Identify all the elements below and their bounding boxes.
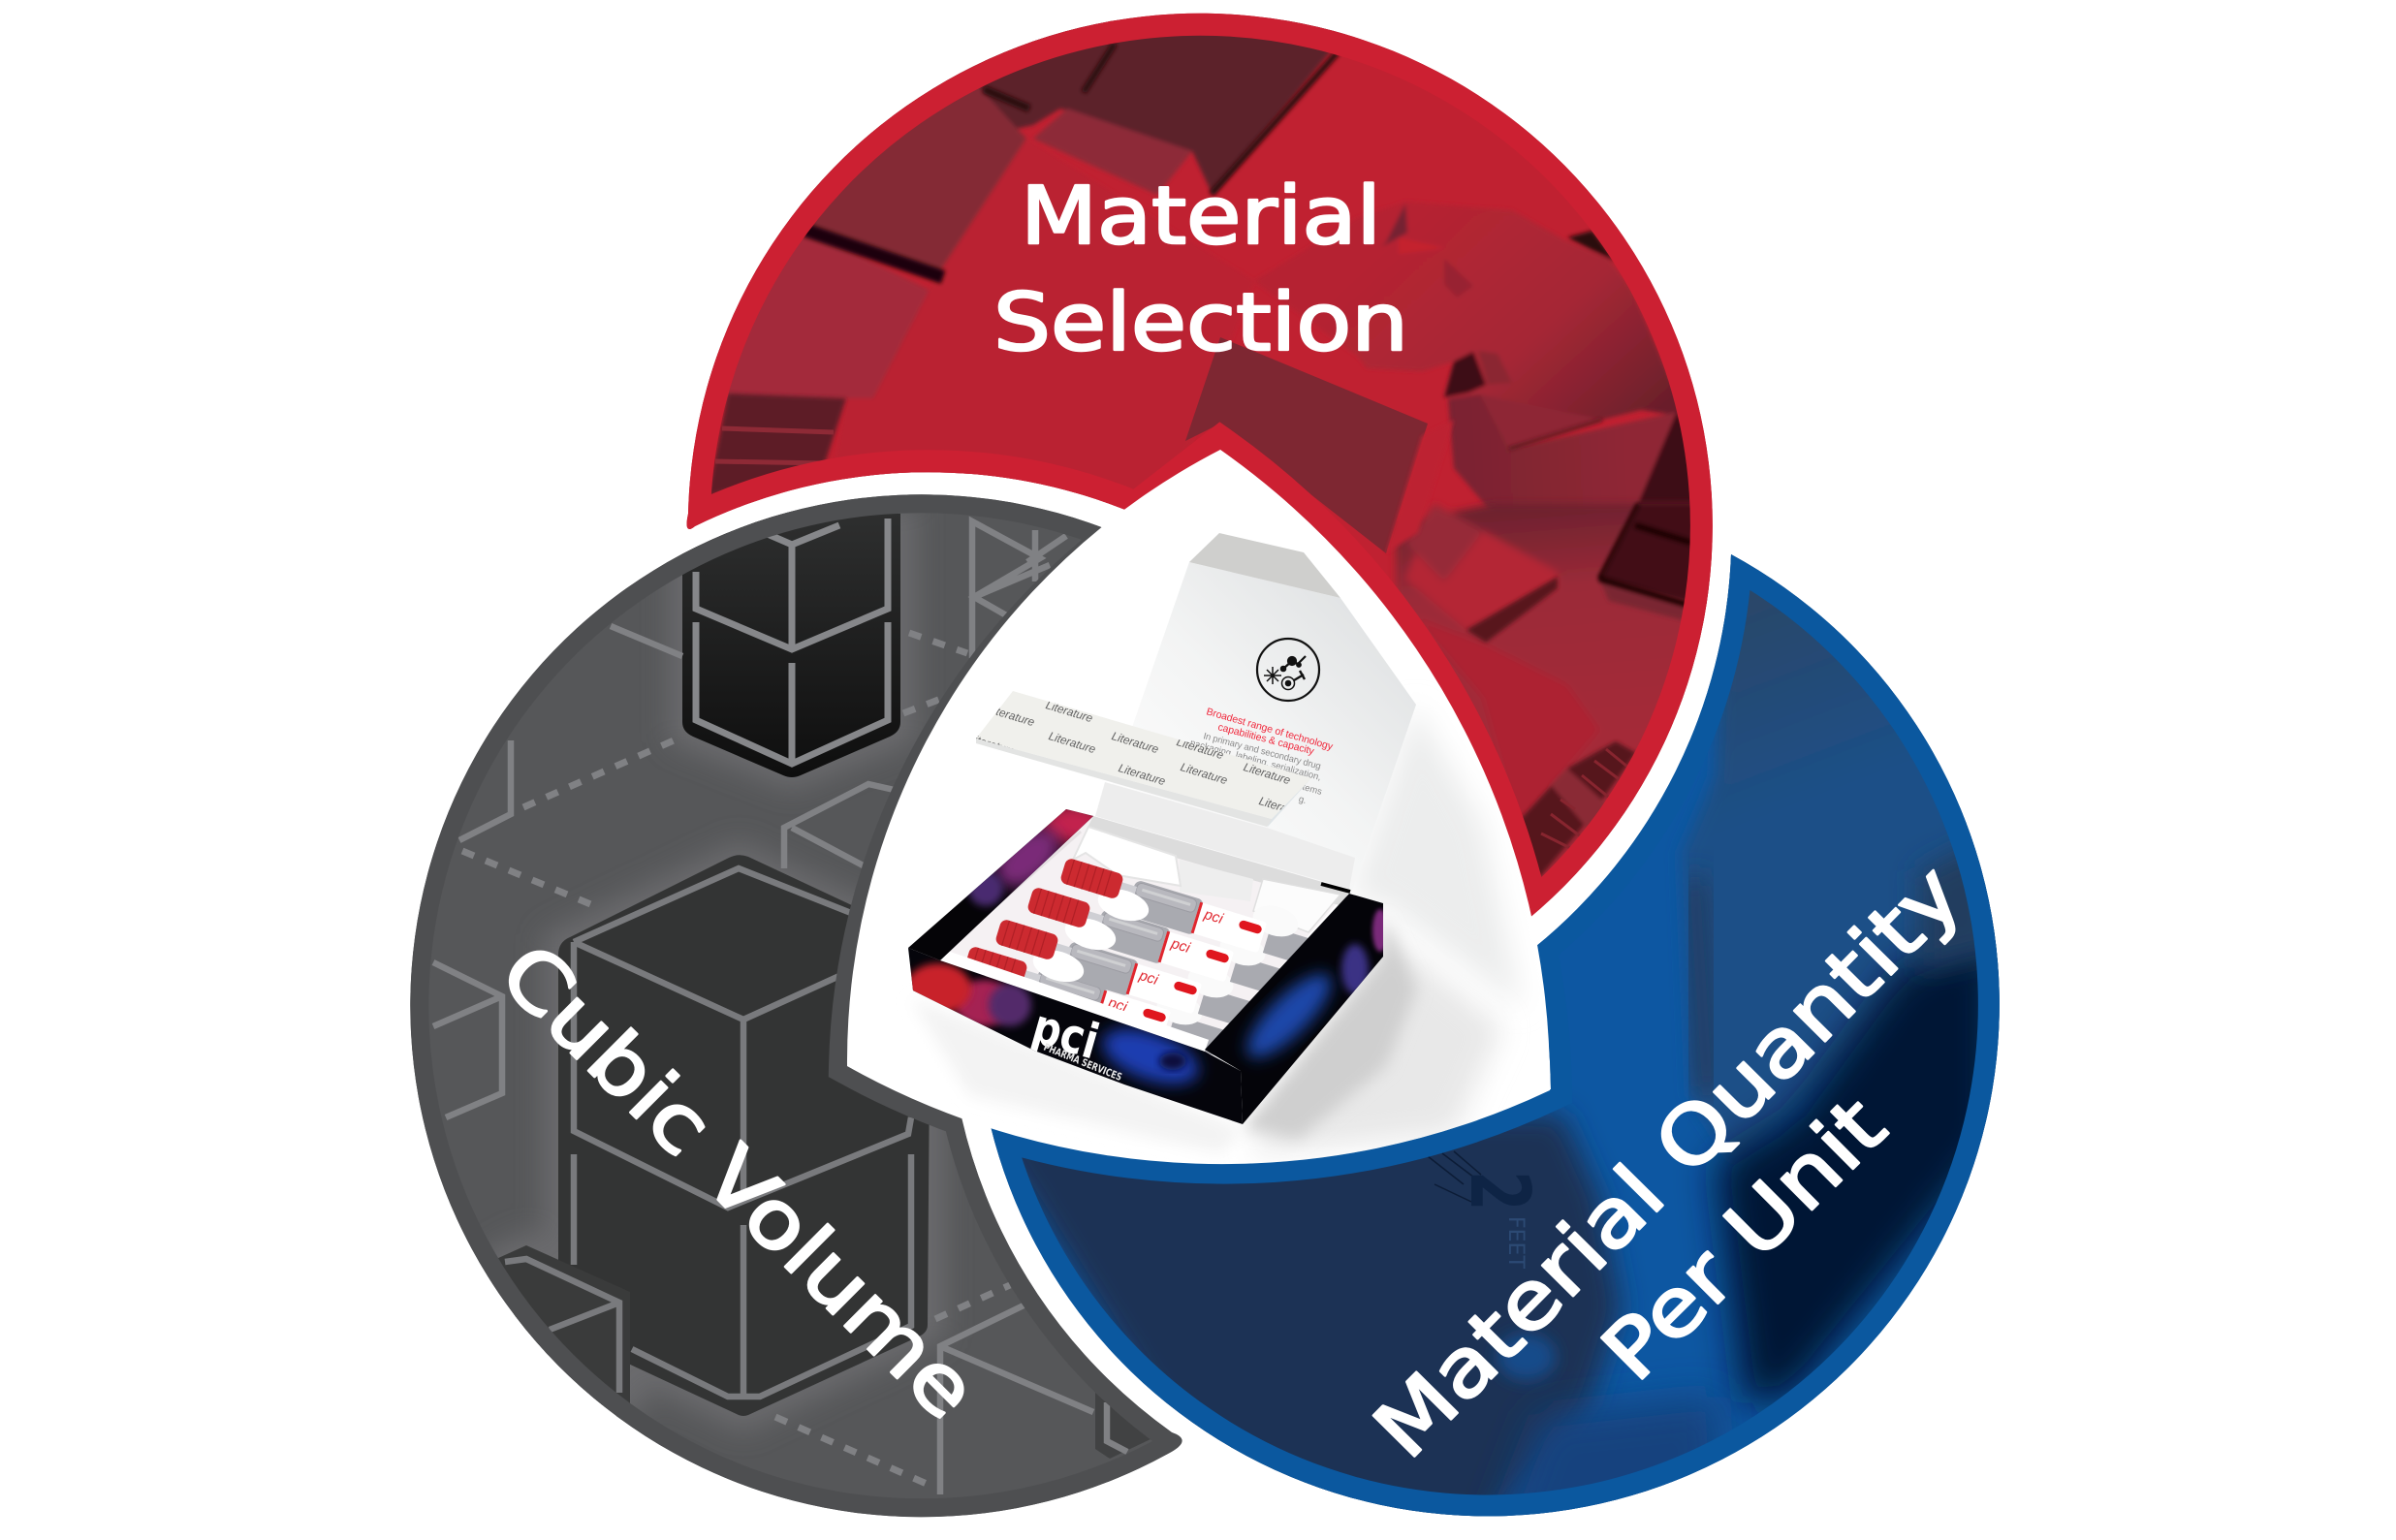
cube halos — [480, 504, 945, 1432]
lid text: In primary and secondary drug — [1202, 731, 1322, 772]
panel: material quantity per unit (blue circle): 2 — [1451, 1171, 1547, 1210]
floor shadow — [911, 705, 1522, 1153]
small cube — [496, 1245, 630, 1405]
literature insert strip: Literature — [1257, 794, 1308, 821]
heading: cubic volume: Cubic Volume — [482, 927, 994, 1437]
box front wall: PHARMA SERVICES — [1042, 1042, 1123, 1084]
panel: material quantity per unit (blue circle): FEET — [1503, 1216, 1528, 1269]
literature insert strip: Literature — [1179, 760, 1229, 787]
heading: material selection — [993, 171, 1408, 369]
sheet of paper — [1481, 395, 1595, 435]
syringe 2: pci — [1168, 935, 1192, 957]
box with syringes — [901, 802, 1391, 1129]
syringe 4: pci — [1105, 994, 1129, 1016]
dark cube — [682, 514, 900, 777]
literature insert strip: Literature — [966, 731, 1017, 758]
heading: material selection: Selection — [993, 277, 1408, 369]
syringe 3 — [996, 920, 1250, 1023]
red border — [687, 14, 1713, 919]
blue border — [991, 554, 2000, 1516]
syringe 4 — [967, 947, 1223, 1056]
front ledge — [942, 956, 1207, 1046]
literature insert strip: Literature — [1044, 698, 1094, 725]
panel: material selection (red circle) — [669, 0, 1735, 930]
literature insert strip: Literature — [986, 702, 1036, 729]
literature insert strip: Literature — [1110, 729, 1160, 756]
panel: centre product photo — [834, 446, 1570, 1173]
ruler marks — [1428, 1151, 1481, 1202]
syringe 2 — [1027, 888, 1279, 990]
wireframe lines — [433, 521, 1127, 1494]
box right wall — [1202, 892, 1391, 1129]
textured panel — [1185, 337, 1428, 553]
panel: cubic volume (grey circle) — [410, 494, 1182, 1518]
lower right floor — [1396, 504, 1725, 901]
corner cube — [1095, 1393, 1151, 1459]
large cube — [558, 855, 930, 1416]
literature insert strip: Literature — [1047, 729, 1097, 756]
syringe 3: pci — [1136, 967, 1160, 989]
icon: technology badge — [1257, 639, 1319, 701]
literature insert strip: Literature — [1175, 735, 1225, 762]
open lid — [1095, 533, 1416, 896]
lid text: capabilities & capacity — [1216, 721, 1316, 758]
syringe 1 — [1060, 859, 1308, 960]
lid text: packaging, labeling, serialization, — [1189, 738, 1322, 783]
lid text: Broadest range of technology — [1205, 706, 1335, 753]
box front wall: pci — [1026, 998, 1105, 1070]
panel: material quantity per unit (blue circle) — [969, 543, 2016, 1540]
heading: material quantity per unit: Material Quantity — [1357, 848, 1980, 1476]
literature insert strip — [966, 691, 1311, 828]
box left rim — [908, 809, 1093, 960]
literature insert strip: Literature — [1117, 761, 1167, 788]
heading: material quantity per unit: Per Unit — [1585, 1081, 1904, 1399]
lid text: g. — [1298, 794, 1308, 806]
literature insert strip: Literature — [1242, 760, 1292, 787]
hand — [1254, 202, 1687, 449]
box front wall — [901, 945, 1250, 1129]
syringe 1: pci — [1201, 906, 1225, 927]
lid text — [1189, 706, 1335, 806]
heading: material selection: Material — [1021, 171, 1381, 263]
lid text: systems — [1288, 778, 1323, 798]
grey border — [410, 494, 1182, 1517]
